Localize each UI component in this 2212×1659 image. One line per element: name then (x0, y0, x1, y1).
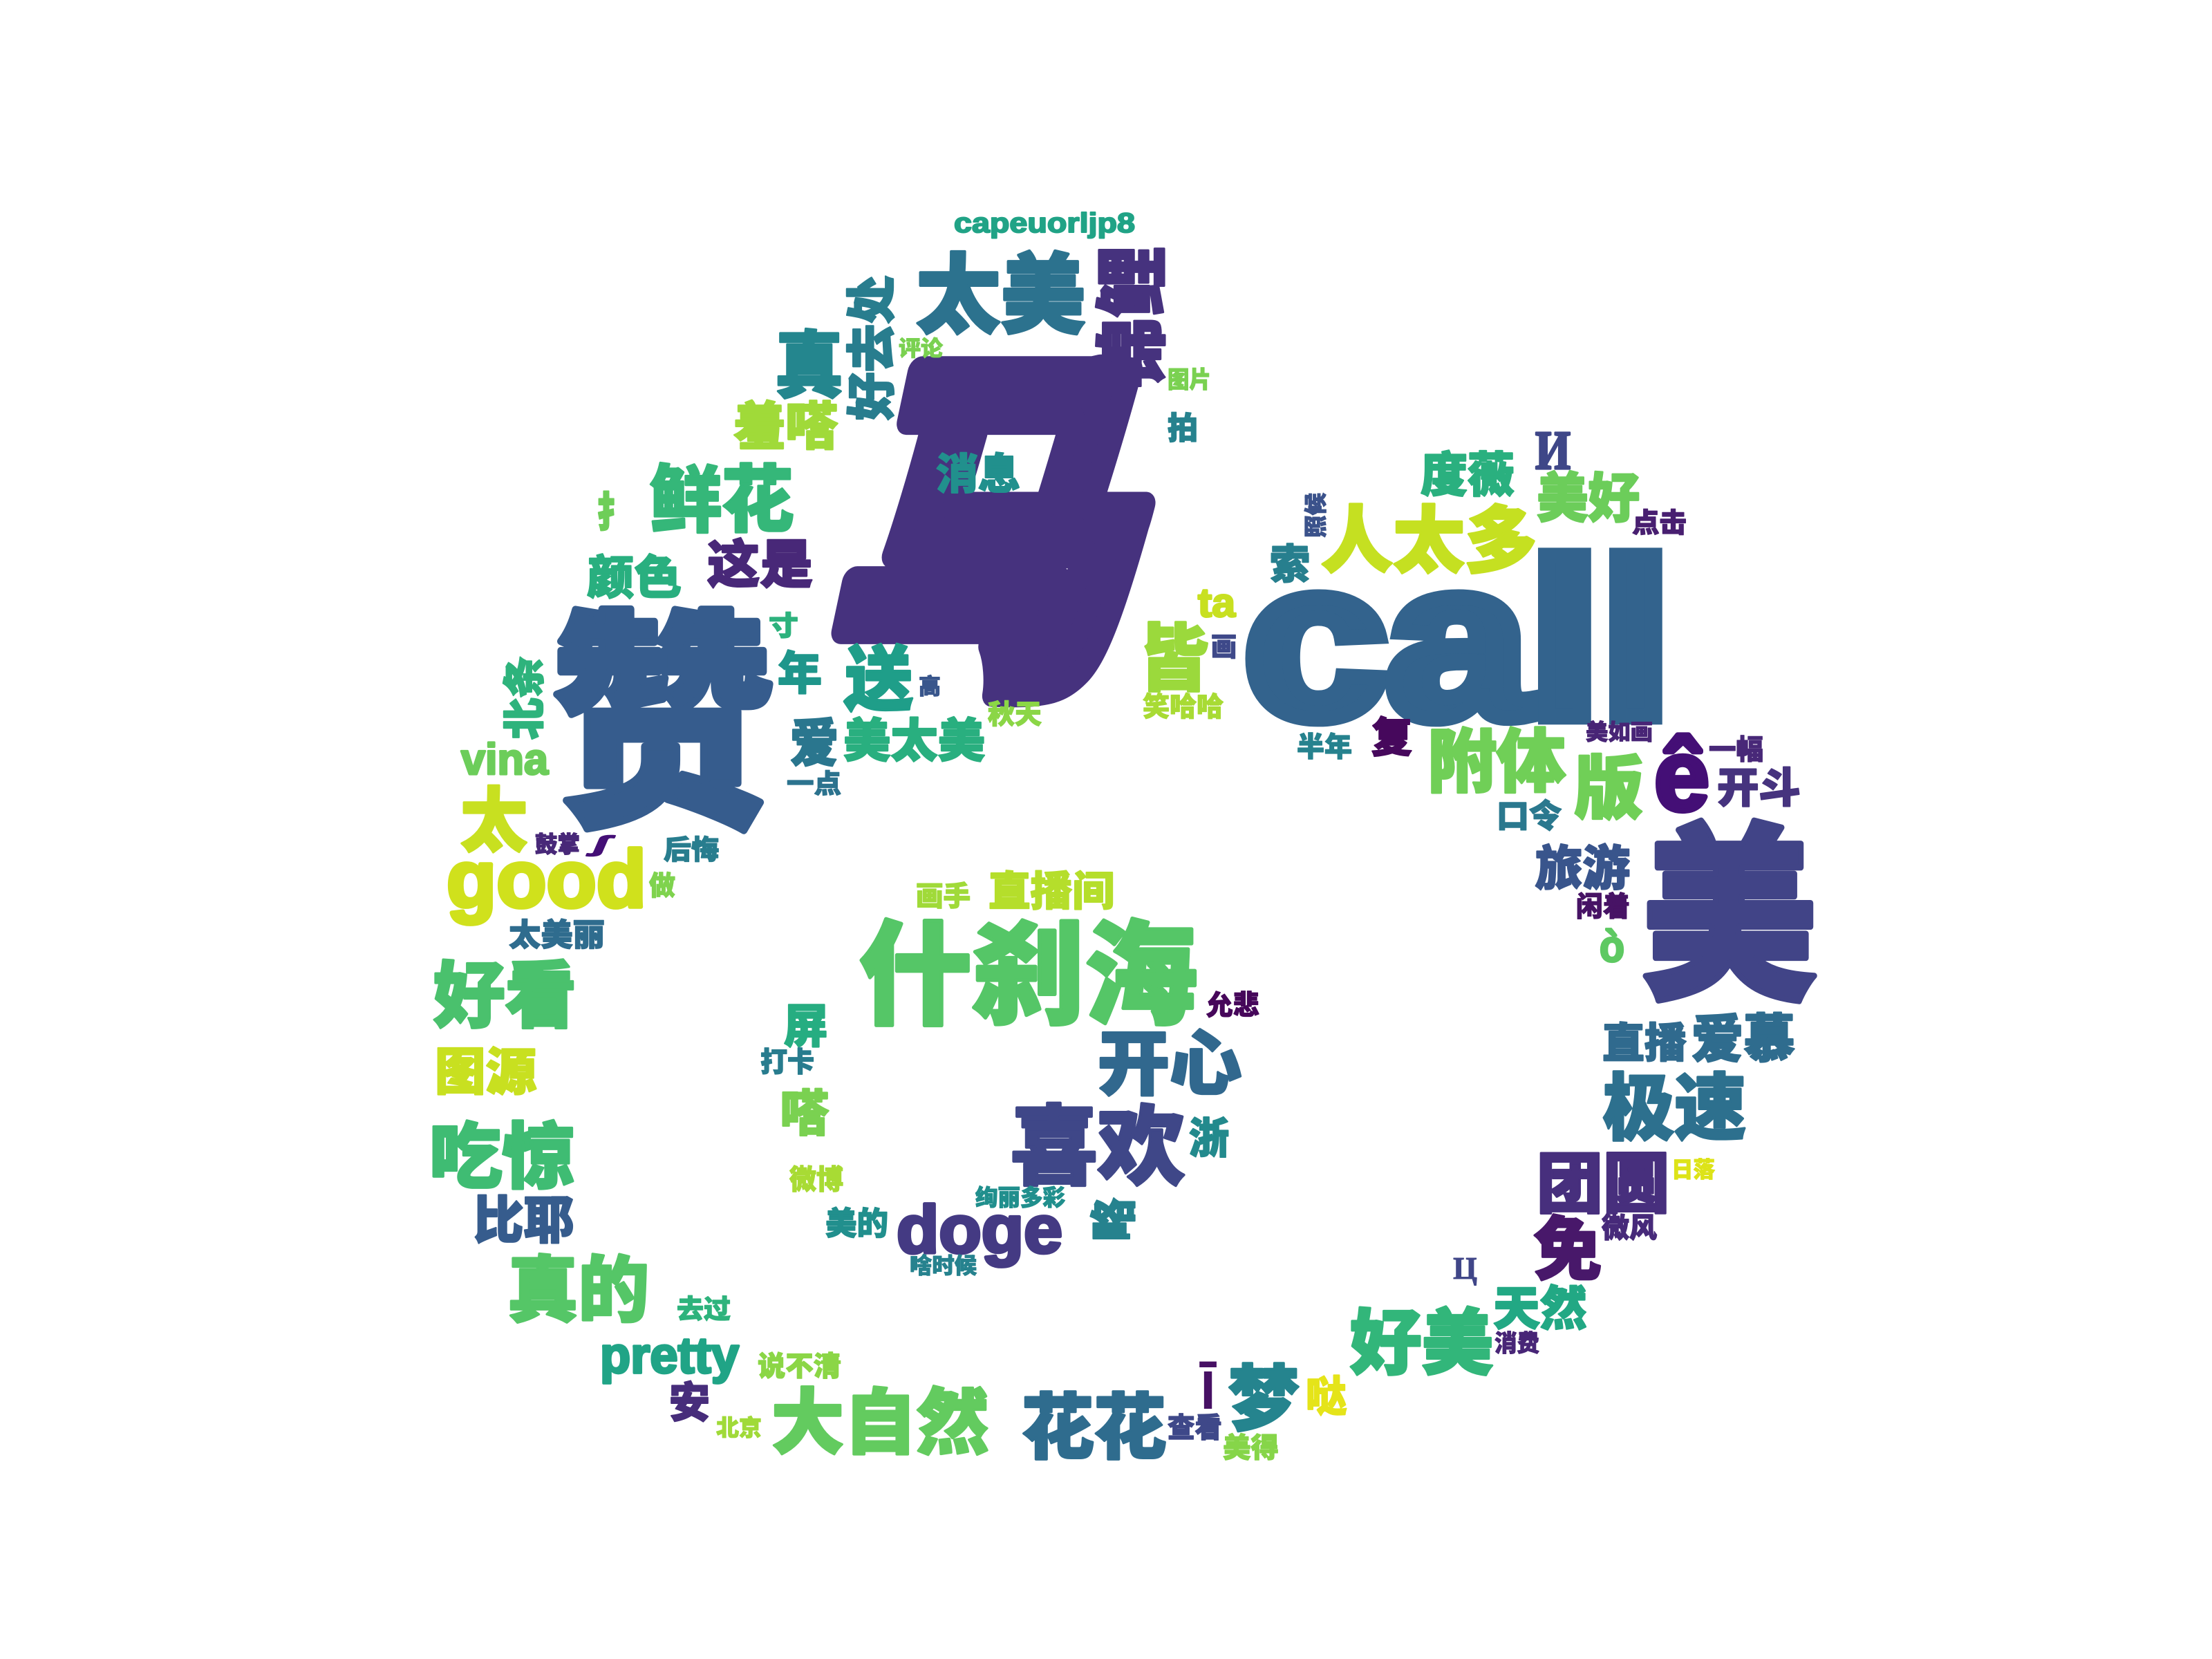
word: capeuorljp8: capeuorljp8 (954, 208, 1135, 238)
word: 梦: 梦 (1228, 1341, 1299, 1445)
word: 图片: 图片 (1168, 361, 1211, 395)
word: 拍: 拍 (1168, 403, 1198, 448)
word: 美的: 美的 (825, 1199, 888, 1244)
word: 开心: 开心 (1098, 1009, 1241, 1109)
word: 爱: 爱 (790, 701, 838, 776)
word: 做: 做 (649, 865, 675, 903)
word: 真: 真 (775, 308, 843, 413)
word: 半年: 半年 (1297, 724, 1352, 765)
word: 这是: 这是 (707, 523, 813, 598)
word: 大自然: 大自然 (771, 1365, 989, 1468)
word: 马 (largest purple glyph): 马 (800, 245, 1215, 760)
word: 真的: 真的 (507, 1232, 649, 1336)
word: 图源: 图源 (435, 1031, 536, 1105)
word: call: call (1244, 516, 1671, 765)
word: 消息: 消息 (936, 440, 1020, 501)
word: 索: 索 (1270, 532, 1310, 590)
word: 鼓掌: 鼓掌 (535, 826, 580, 859)
word: 画: 画 (1211, 626, 1237, 664)
word: 闲着: 闲着 (1576, 884, 1630, 924)
word: vina: vina (461, 735, 549, 784)
word: 去过: 去过 (677, 1288, 731, 1326)
word: 绚丽多彩: 绚丽多彩 (975, 1179, 1065, 1212)
word: 秋天: 秋天 (988, 693, 1042, 732)
word: 啥时候: 啥时候 (910, 1248, 977, 1280)
word: 极速: 极速 (1603, 1050, 1746, 1155)
word: ʃ: ʃ (585, 832, 615, 856)
word: ê: ê (1654, 719, 1709, 832)
word: 嗒: 嗒 (780, 1073, 829, 1145)
word: 花花: 花花 (1022, 1370, 1166, 1473)
word: 微风: 微风 (1602, 1206, 1657, 1246)
word: 旅游: 旅游 (1535, 830, 1630, 899)
word: 一点: 一点 (787, 762, 841, 800)
word: 皆: 皆 (1138, 601, 1209, 706)
word: 颜色: 颜色 (587, 541, 682, 608)
word: doge: doge (897, 1192, 1062, 1267)
word: ta: ta (1198, 581, 1236, 626)
word: 太美: 太美 (916, 225, 1085, 350)
word: 锦鲤 (rotated): 锦鲤 (1074, 246, 1179, 389)
word: 太: 太 (460, 765, 527, 866)
word: 鲜花: 鲜花 (650, 442, 794, 547)
word: 画手: 画手 (916, 874, 971, 914)
word: 微博: 微博 (789, 1157, 843, 1197)
word: 好看: 好看 (433, 937, 577, 1042)
word: 爱慕: 爱慕 (1691, 997, 1795, 1072)
word: 浙: 浙 (1189, 1104, 1229, 1165)
word: 美得: 美得 (1223, 1425, 1279, 1465)
word: 直播: 直播 (1602, 1010, 1687, 1070)
word: 口令: 口令 (1497, 789, 1562, 837)
word: 比耶: 比耶 (474, 1179, 574, 1253)
word: 开斗: 开斗 (1717, 755, 1801, 815)
word: 扌: 扌 (597, 480, 630, 540)
word: 附体: 附体 (1427, 706, 1566, 806)
word: 免: 免 (1534, 1194, 1602, 1294)
word: 羞嗒: 羞嗒 (733, 384, 838, 460)
word: 北条 (rotated): 北条 (490, 656, 552, 740)
word: 赞: 赞 (551, 540, 774, 874)
word: 允悲: 允悲 (1206, 984, 1259, 1023)
word: 美好: 美好 (1537, 456, 1640, 533)
word: 复: 复 (1371, 703, 1412, 765)
word: 照候 (rotated): 照候 (1297, 493, 1331, 538)
word: 高: 高 (919, 669, 941, 701)
word: 安: 安 (669, 1368, 710, 1430)
word: 团圆: 团圆 (1537, 1132, 1669, 1226)
word: 年: 年 (778, 637, 822, 703)
word: 北京: 北京 (716, 1409, 762, 1443)
word: 消费: 消费 (1494, 1324, 1539, 1358)
word: 一幅: 一幅 (1709, 727, 1763, 767)
word: 送: 送 (844, 624, 913, 725)
word: 喜欢: 喜欢 (1011, 1077, 1185, 1202)
word: 美太美: 美太美 (843, 704, 985, 771)
word: 打卡: 打卡 (760, 1040, 814, 1080)
word: 吃惊: 吃惊 (429, 1098, 575, 1203)
word: 笑哈哈: 笑哈哈 (1143, 686, 1224, 724)
word: Ц: Ц (1453, 1250, 1477, 1286)
word: pretty: pretty (600, 1328, 739, 1384)
word: 版: 版 (1574, 733, 1643, 832)
word: 点击: 点击 (1632, 502, 1687, 541)
word: 人太多: 人太多 (1321, 482, 1537, 588)
word: ī: ī (1199, 1345, 1217, 1424)
word: 太美丽: 太美丽 (509, 910, 605, 955)
word: 直播间: 直播间 (988, 859, 1114, 917)
word: 度薇: 度薇 (1421, 436, 1515, 505)
word: 美: 美 (1642, 765, 1817, 1038)
word: 说不清: 说不清 (758, 1344, 841, 1384)
word: 略 (rotated): 略 (1077, 1198, 1144, 1241)
word: 寸: 寸 (769, 605, 798, 644)
word: 日落: 日落 (1671, 1152, 1715, 1184)
word: 好去处 (rotated): 好去处 (833, 276, 903, 420)
word: 什刹海: 什刹海 (859, 884, 1197, 1047)
word: 屏: 屏 (784, 989, 827, 1056)
word: 天然: 天然 (1493, 1271, 1587, 1339)
word: 美如画: 美如画 (1586, 715, 1653, 747)
word: 后悔: 后悔 (664, 829, 719, 868)
word: good: good (447, 834, 646, 924)
word: 评论: 评论 (899, 331, 944, 362)
word: 哒: 哒 (1306, 1363, 1347, 1423)
word: 好美: 好美 (1350, 1286, 1493, 1389)
word: 查看: 查看 (1168, 1405, 1222, 1445)
word: И: И (1535, 421, 1571, 481)
word: ò: ò (1600, 921, 1624, 971)
